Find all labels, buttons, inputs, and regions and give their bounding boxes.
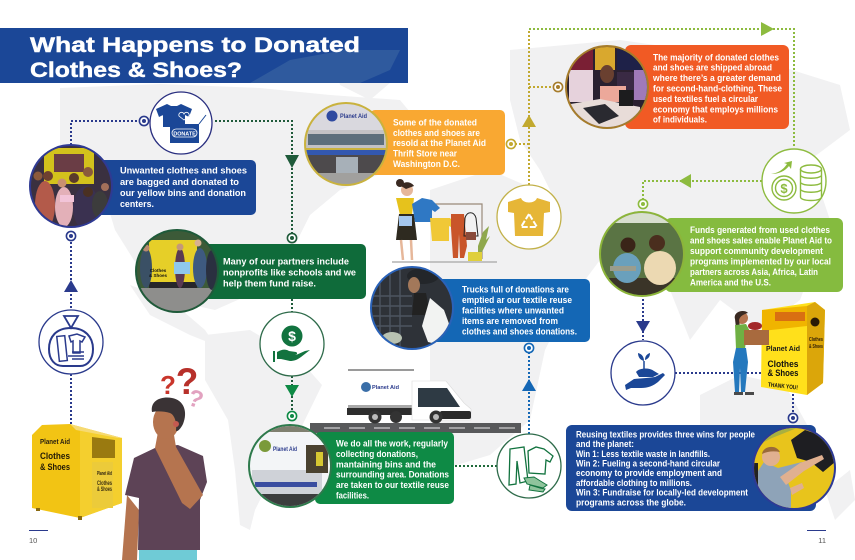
text: partners: Many of our partners include — [223, 256, 349, 268]
panel: partners — [135, 229, 366, 314]
text: collection: We do all the work, regularly — [336, 438, 449, 449]
text: funds: Funds generated from used clothes — [690, 225, 830, 236]
text: shipped abroad — [652, 52, 782, 125]
text: shipped abroad: The majority of donated clothes — [653, 52, 779, 63]
illustration: woman with box at yellow bin: Clothes — [809, 337, 823, 343]
photo: truck loading — [248, 424, 332, 508]
text: collection: collecting donations, — [336, 449, 418, 460]
text: shipped abroad: of individuals. — [653, 114, 707, 126]
arrow: up to bagged clothes — [64, 280, 78, 292]
text: trucks — [462, 284, 577, 337]
text: trucks: emptied ar our textile reuse — [462, 295, 572, 306]
title text: What Happens to Donated — [30, 33, 360, 57]
panel: road and truck: Planet Aid — [372, 385, 399, 391]
text: thrift store: clothes and shoes are — [393, 128, 480, 139]
photo: thrift store: Planet Aid — [340, 113, 367, 120]
connector: olive — [515, 29, 554, 185]
icon: dollar in hand: $ — [288, 328, 296, 344]
text: three wins — [576, 429, 755, 507]
arrow: down to collection — [285, 385, 299, 397]
illustration: yellow donation bin left: & Shoes — [40, 462, 70, 473]
illustration: thinking person — [122, 398, 207, 560]
text: shipped abroad: economy that employs millions — [653, 104, 778, 115]
photo: children donating — [29, 144, 113, 230]
text: collection: are taken to our textile reuse — [336, 480, 449, 491]
title banner — [0, 28, 408, 83]
illustration: woman with box at yellow bin: & Shoes — [809, 344, 823, 350]
panel: collection — [248, 424, 454, 508]
illustration: woman with box at yellow bin: Planet Aid — [766, 346, 800, 353]
text: three wins: Win 2: Fueling a second-hand circular — [576, 458, 720, 468]
arrow: down to dollar — [285, 155, 299, 168]
text: shipped abroad: where there’s a greater demand — [652, 73, 781, 84]
icon: clothes and shoes — [497, 434, 561, 498]
illustration: woman with box at yellow bin: Clothes — [768, 359, 798, 370]
text: trucks: clothes and shoes donations. — [462, 326, 577, 337]
photo: market seller — [565, 45, 649, 129]
photo: truck loading: Planet Aid — [273, 446, 297, 453]
panel: trucks at reuse facility — [370, 266, 590, 350]
illustration: yellow donation bin left — [32, 424, 122, 520]
text: funds: partners across Asia, Africa, Latin — [690, 267, 818, 278]
illustration: woman with box at yellow bin: THANK YOU! — [768, 382, 798, 392]
text: partners: nonprofits like schools and we — [223, 268, 356, 278]
arrow: right along top — [761, 22, 774, 36]
text: funds — [690, 225, 832, 288]
photo: boy at donation bin — [752, 426, 836, 514]
text: three wins: Reusing textiles provides three wins for people — [576, 429, 755, 439]
icon: coins with growth arrow: $ — [780, 181, 788, 196]
illustration: yellow donation bin left: Planet Aid — [40, 439, 70, 446]
illustration: question marks: ? — [184, 384, 207, 415]
text: unwanted clothes — [120, 166, 247, 210]
page number left: 10 — [29, 536, 37, 545]
text: shipped abroad: used textiles fuel a circular — [653, 94, 758, 105]
text: trucks: items are removed from — [462, 316, 558, 327]
illustration: yellow donation bin left: & Shoes — [97, 487, 112, 493]
text: unwanted clothes: centers. — [120, 199, 154, 210]
panel: shipped abroad — [565, 45, 789, 129]
text: three wins: economy to provide employment and — [576, 468, 722, 478]
arrow: down to planting — [636, 321, 650, 333]
connector: dark green — [215, 121, 292, 412]
page number left — [29, 530, 48, 545]
icon: donate box with t-shirt: DONATE — [173, 131, 196, 137]
illustration: question marks: ? — [176, 361, 198, 402]
text: three wins: and the planet: — [576, 439, 634, 449]
arrow: up to trucks — [522, 379, 536, 391]
illustration: question marks: ? — [160, 370, 176, 400]
photo: partners with check — [135, 229, 219, 314]
text: thrift store: Some of the donated — [393, 117, 477, 128]
illustration: yellow donation bin left: Planet Aid — [97, 471, 112, 477]
connector: lime — [529, 29, 794, 200]
connector: clothes to tee — [455, 465, 497, 467]
text: funds: and shoes sales enable Planet Aid to — [690, 236, 832, 246]
text: thrift store: resold at the Planet Aid — [393, 138, 486, 149]
icon: dollar in hand — [260, 312, 324, 376]
text: three wins: programs across the globe. — [576, 497, 686, 507]
panel: road and truck — [310, 369, 521, 433]
page number right: 11 — [818, 536, 826, 545]
text: collection: mantaining bins and the — [336, 459, 436, 470]
text: three wins: Win 3: Fundraise for locally-led development — [576, 488, 748, 498]
text: unwanted clothes: are bagged and donated to — [120, 177, 239, 188]
connector: navy right — [643, 299, 793, 414]
text: partners — [223, 256, 356, 290]
illustration: woman with box at yellow bin: & Shoes — [768, 368, 798, 379]
illustration: question marks — [160, 361, 207, 415]
photo: partners with check: Clothes — [150, 268, 167, 273]
photo: community farmers — [599, 211, 685, 297]
illustration: yellow donation bin left: Clothes — [40, 451, 70, 462]
text: funds: support community development — [690, 246, 824, 257]
icon: bagged clothes — [39, 310, 103, 374]
text: partners: help them fund raise. — [223, 278, 316, 290]
arrow: up to export — [522, 115, 536, 127]
text: three wins: Win 1: Less textile waste in landfills. — [576, 449, 710, 459]
node markers — [66, 82, 798, 423]
illustration: woman with box at yellow bin — [733, 302, 825, 395]
photo: thrift store — [304, 102, 388, 187]
text: three wins: affordable clothing to millions. — [576, 478, 692, 488]
panel: three wins — [566, 425, 836, 514]
icon: recycled t-shirt — [497, 185, 561, 249]
illustration: woman with clothes rack — [392, 179, 497, 262]
text: thrift store: Thrift Store near — [393, 148, 457, 160]
text: collection: surrounding area. Donations — [336, 470, 449, 480]
icon: donate box with t-shirt — [150, 92, 212, 154]
panel: funds generated — [599, 211, 843, 297]
text: unwanted clothes: our yellow bins and donation — [120, 188, 246, 199]
text: shipped abroad: for second-hand-clothing. These — [653, 84, 782, 94]
text: collection — [336, 438, 449, 501]
text: unwanted clothes: Unwanted clothes and shoes — [120, 166, 247, 176]
photo: partners with check: & Shoes — [149, 273, 167, 278]
panel: unwanted clothes — [29, 144, 256, 230]
panel: resold at thrift store — [304, 102, 505, 187]
text: trucks: Trucks full of donations are — [462, 284, 569, 295]
connector: blue up — [528, 352, 530, 434]
text: thrift store — [393, 117, 486, 170]
page number right — [807, 530, 826, 545]
text: trucks: facilities where unwanted — [462, 305, 564, 316]
icon: coins with growth arrow — [762, 149, 826, 213]
illustration: yellow donation bin left: Clothes — [97, 481, 112, 487]
icon: hand with seedling — [611, 341, 675, 405]
text: thrift store: Washington D.C. — [393, 159, 460, 170]
arrow: left to funds — [679, 174, 691, 188]
text: shipped abroad: and shoes are shipped abroad — [653, 62, 772, 74]
connector: navy left loop — [71, 121, 140, 424]
text: funds: programs implemented by our local — [690, 256, 831, 267]
text: collection: facilities. — [336, 490, 369, 501]
text: funds: America and the U.S. — [690, 277, 771, 288]
title text: Clothes & Shoes? — [30, 58, 242, 82]
photo: textile facility — [370, 266, 454, 350]
